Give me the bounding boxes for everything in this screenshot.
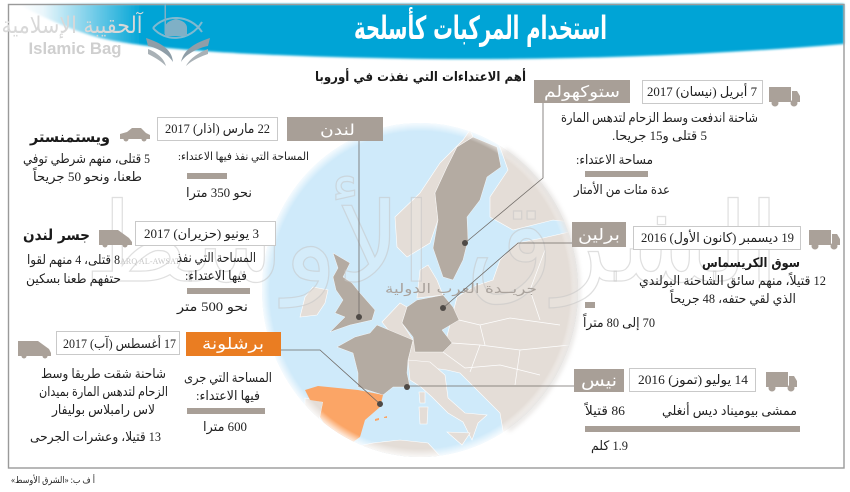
panel: Stockholm: 5 قتلى و15 جريحا. (612, 128, 707, 144)
panel: Barcelona: المساحة التي جرى (184, 370, 272, 386)
country: Spain (305, 386, 383, 442)
watermark: newspaper name: الشرق الأوسط (84, 175, 779, 308)
panel: London Bridge: حتفهم طعنا بسكين (26, 271, 121, 287)
panel: London Westminster (23, 117, 383, 201)
panel: Barcelona: شاحنة شقت طريقا وسط (41, 366, 166, 382)
panel: London Bridge: 8 قتلى، 4 منهم لقوا (27, 252, 120, 268)
panel: Nice (574, 368, 800, 454)
panel: Berlin: الذي لقي حتفه، 48 جريحاً (670, 289, 796, 307)
watermark: Islamic Bag logo: Islamic Bag (28, 39, 122, 58)
panel: Barcelona: فيها الاعتداء: (196, 388, 260, 404)
panel: Stockholm: مساحة الاعتداء: (576, 152, 653, 167)
country: Germany (402, 295, 459, 352)
panel: Barcelona: برشلونة (202, 334, 264, 354)
country: Sweden (433, 137, 501, 280)
panel: London Westminster: ويستمنستر (29, 128, 110, 146)
panel: Berlin: سوق الكريسماس (702, 256, 800, 271)
leader line: Nice (407, 385, 574, 387)
subtitle: أهم الاعتداءات التي نفذت في أوروبا (315, 68, 526, 85)
panel: Berlin: 70 إلى 80 متراً (583, 313, 655, 331)
watermark: newspaper subtitle: جريــدة العرب الدولية (385, 282, 537, 297)
panel: Stockholm: 7 أبريل (نيسان) 2017 (647, 83, 757, 100)
panel: Barcelona: 13 قتيلا، وعشرات الجرحى (30, 429, 161, 445)
panel: Stockholm (534, 80, 800, 198)
panel: Barcelona: 17 أغسطس (آب) 2017 (63, 335, 176, 352)
credit: أ ف ب: «الشرق الأوسط» (11, 474, 95, 485)
panel: London Bridge: المساحة التي نفذ (177, 250, 256, 265)
leader line: Berlin (443, 243, 572, 308)
panel: Berlin: برلين (578, 225, 620, 245)
header band (18, 4, 844, 59)
watermark: Islamic Bag logo (2, 4, 210, 66)
panel: London Westminster: لندن (320, 121, 355, 139)
panel: London Bridge: فيها الاعتداء: (185, 268, 247, 284)
watermark: Islamic Bag logo: آلحقيبة الإسلامية (2, 11, 144, 39)
panel: Stockholm: شاحنة اندفعت وسط الزحام لتدهس المارة (561, 110, 758, 126)
title: استخدام المركبات كأسلحة (354, 7, 607, 47)
map of Europe (262, 123, 600, 470)
panel: Stockholm: عدة مئات من الأمتار (573, 181, 670, 198)
panel: Berlin: 19 ديسمبر (كانون الأول) 2016 (641, 229, 794, 246)
leader line: Barcelona (281, 350, 380, 404)
panel: London Bridge: جسر لندن (23, 226, 90, 244)
watermark: latin name: ARQ AL-AWSAT (120, 257, 180, 266)
city markers (356, 240, 468, 407)
panel: Barcelona: 600 مترا (203, 419, 247, 435)
panel: London Westminster: نحو 350 مترا (186, 185, 252, 201)
leader line: Stockholm (465, 103, 543, 243)
country: France (337, 325, 413, 395)
panel: London Westminster: 5 قتلى، منهم شرطي توفي (23, 151, 150, 167)
panel: Nice: ممشى بيوميناد ديس أنغلي (662, 402, 797, 419)
panel: Barcelona: الزحام لتدهس المارة بميدان (39, 384, 168, 400)
panel: Nice: 1.9 كلم (591, 438, 628, 454)
panel: Nice: نيس (581, 371, 617, 391)
country: United Kingdom (330, 253, 375, 332)
panel: London Bridge: نحو 500 متر (176, 299, 248, 315)
panel: Nice: 86 قتيلاً (584, 402, 626, 418)
leader line: London (358, 141, 360, 317)
panel: London Bridge: 3 يونيو (حزيران) 2017 (144, 226, 259, 242)
panel: London Westminster: 22 مارس (اذار) 2017 (165, 121, 270, 137)
panel: Barcelona: لاس رامبلاس بوليفار (51, 402, 155, 418)
panel: London Westminster: المساحة التي نفذ فيها الاعتداء: (178, 151, 309, 163)
panel: Stockholm: ستوكهولم (544, 82, 620, 102)
panel: Berlin (572, 222, 840, 331)
panel: London Westminster: طعنا، ونحو 50 جريحاً (33, 167, 142, 185)
panel: Nice: 14 يوليو (تموز) 2016 (638, 372, 749, 388)
panel: Barcelona (18, 332, 281, 445)
panel: Berlin: 12 قتيلاً، منهم سائق الشاحنة البولندي (639, 272, 826, 289)
panel: London Bridge (23, 222, 276, 315)
